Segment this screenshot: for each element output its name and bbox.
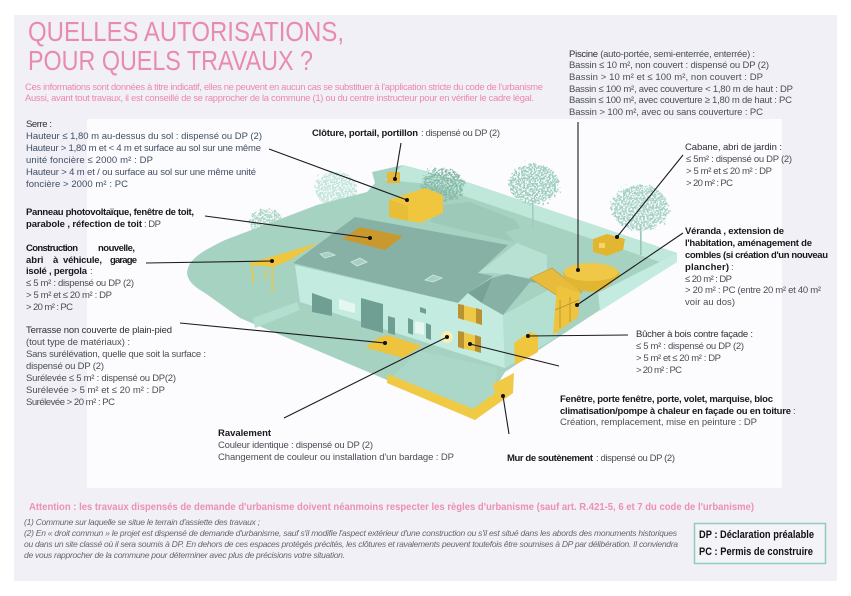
text: serre: Hauteur > 1,80 m et < 4 m et surface au sol sur une même [26,143,261,154]
text: piscine: Bassin > 10 m² et ≤ 100 m², non couvert : DP [569,72,763,83]
text: cloture: Clôture, portail, portillon [312,128,418,139]
leader: veranda [575,233,683,307]
footnotes: ou dans un site classé où il sera soumis à DP. En dehors de ces espaces protégés précités, les clôtures et ravalements peuvent toutefois être soumises à DP par délibération. Il conviendra [24,539,678,549]
legend box: PC : Permis de construire [699,546,813,558]
text: piscine [569,49,793,118]
text: terrasse: dispensé ou DP (2) [26,361,104,372]
yellow: woodshed [514,332,538,365]
tree left [249,209,283,266]
text: terrasse: (tout type de matériaux) : [26,337,130,348]
text: cabane: > 5 m² et ≤ 20 m² : DP [686,166,772,177]
sunken court [392,351,497,409]
text: piscine: Bassin ≤ 10 m², non couvert : dispensé ou DP (2) [569,60,769,71]
back garden strip [385,165,677,262]
text: ravalement: Ravalement [218,428,272,439]
text: bucher: > 20 m² : PC [636,365,682,376]
text: construction nouvelle: ≤ 5 m² : dispensé ou DP (2) [26,278,134,289]
text: piscine: Bassin ≤ 100 m², avec couverture ≥ 1,80 m de haut : PC [569,95,792,106]
footnotes: (2) En « droit commun » le projet est dispensé de demande d'urbanisme, sauf s'il modifie l'aspect extérieur d'une construction ou s'il est situé dans les abords des monuments historiques [24,528,678,538]
text: veranda: combles (si création d'un nouveau [685,250,828,261]
leader: fence [393,143,401,181]
text: construction nouvelle: > 5 m² et ≤ 20 m² : DP [26,290,112,301]
central white panel [87,119,782,488]
back roof [478,243,547,282]
skylights [320,252,442,282]
tree back right [509,164,559,228]
leader: pergola [146,259,274,263]
text: serre: unité foncière ≤ 2000 m² : DP [26,155,153,166]
text: fenetre [560,394,796,428]
footnotes: (1) Commune sur laquelle se situe le terrain d'assiette des travaux ; [24,517,261,527]
text: ravalement [218,428,454,463]
yellow: upper window [458,304,482,325]
text: construction nouvelle: à [53,255,59,266]
leader: window [468,342,559,366]
leader: greenhouse [269,149,409,202]
text: veranda [685,226,828,308]
text: terrasse: Surélevée > 20 m² : PC [26,397,115,408]
text: serre [26,119,262,190]
text: cabane: ≤ 5m² : dispensé ou DP (2) [686,154,792,165]
text: piscine: Piscine (auto-portée, semi-enterrée, enterrée) : [569,49,755,60]
intro text: Ces informations sont données à titre indicatif, elles ne peuvent en aucun cas se substituer à l'application stricte du code de l'urbanisme [25,81,543,92]
leader: garden shed [615,155,683,239]
text: veranda: Véranda , extension de [685,226,784,237]
attention notice: Attention : les travaux dispensés de demande d'urbanisme doivent néanmoins respecter les règles d'urbanisme (sauf art. R.421-5, 6 et 7 du code de l'urbanisme) [29,501,754,513]
text: ravalement: Changement de couleur ou installation d'un bardage : DP [218,452,454,463]
text: veranda: ≤ 20 m² : DP [685,274,732,285]
roof hip [468,278,492,303]
text: serre: Hauteur > 4 m et / ou surface au sol sur une même unité [26,167,256,178]
intro text: Aussi, avant tout travaux, il est conseillé de se rapprocher de la commune (1) ou du centre instructeur pour en vérifier le cadre légal. [25,92,534,103]
yellow: terrace [367,335,422,358]
front wall [295,265,505,368]
text: ravalement: Couleur identique : dispensé ou DP (2) [218,440,373,451]
text: terrasse: Sans surélévation, quelle que soit la surface : [26,349,206,360]
text: cloture [312,128,500,139]
text: terrasse: Surélevée > 5 m² et ≤ 20 m² : DP [26,385,165,396]
text: cabane: Cabane, abri de jardin : [685,142,782,153]
yellow: veranda [530,268,582,335]
title: POUR QUELS TRAVAUX ? [28,45,313,76]
footnotes [24,517,678,560]
text: bucher [636,329,753,376]
lawn shadow [430,202,520,242]
illustration: house and plot [187,164,677,420]
side wall [503,285,557,368]
yellow: pool [563,263,620,292]
text: construction nouvelle: véhicule, [63,255,102,266]
text: construction nouvelle: abri [26,255,43,266]
text: serre: Serre : [26,119,52,130]
text: construction nouvelle: Construction [26,243,78,254]
text: fenetre: climatisation/pompe à chaleur en façade ou en toiture [560,406,791,417]
yellow: solar panel [342,227,403,250]
text: veranda: l'habitation, aménagement de [685,238,812,249]
yellow: fence gate [387,172,400,183]
tree far right [612,185,668,255]
intro text [25,81,543,103]
text: panneau photovoltaique: parabole , réfection de toit [26,219,143,230]
leader: pool [576,122,580,272]
text: terrasse: Terrasse non couverte de plain-pied [26,325,172,336]
text: bucher: > 5 m² et ≤ 20 m² : DP [636,353,721,364]
text: construction nouvelle: garage [110,255,137,266]
text: piscine: Bassin ≤ 100 m², avec couverture < 1,80 m de haut : DP [569,84,793,95]
text: fenetre: Création, remplacement, mise en peinture : DP [560,417,757,428]
text: cloture: : dispensé ou DP (2) [421,128,500,139]
text: piscine: Bassin > 100 m², avec ou sans couverture : PC [569,107,763,118]
leader: terrace [180,323,387,345]
yellow: greenhouse [389,188,443,223]
text: construction nouvelle: : [90,266,93,277]
yellow: wall glow [441,331,453,343]
text: serre: Hauteur ≤ 1,80 m au-dessus du sol : dispensé ou DP (2) [26,131,262,142]
text: terrasse [26,325,206,408]
text: mur de soutenement: : dispensé ou DP (2) [596,453,675,464]
text: bucher: Bûcher à bois contre façade : [636,329,753,340]
gable roof [468,274,557,315]
legend box [694,524,826,564]
leader: retaining wall [501,394,509,434]
main roof [293,217,508,303]
text: construction nouvelle: nouvelle, [98,243,135,254]
text: veranda: voir au dos) [685,297,735,308]
text: cabane [685,142,792,189]
low left wall [253,302,300,328]
text: panneau photovoltaique [26,207,194,230]
title [28,16,344,76]
text: veranda: > 20 m² : PC (entre 20 m² et 40 m² [685,285,821,296]
front window panes [339,299,424,335]
text: construction nouvelle: > 20 m² : PC [26,302,73,313]
legend box: DP : Déclaration préalable [699,529,814,541]
text: cabane: > 20 m² : PC [686,178,733,189]
footnotes: de vous rapprocher de la commune pour déterminer avec plus de précisions votre situation. [24,550,345,560]
tree back left [315,172,357,225]
title: QUELLES AUTORISATIONS, [28,16,344,47]
text: veranda: : [731,262,734,273]
text: bucher: ≤ 5 m² : dispensé ou DP (2) [636,341,744,352]
leader: solar panel [205,216,372,240]
text: serre: foncière > 2000 m² : PC [26,179,128,190]
yellow: lower window [458,331,481,353]
text: panneau photovoltaique: : DP [144,219,161,230]
ground [187,165,677,420]
leader: facade [284,335,449,418]
text: mur de soutenement: Mur de soutènement [507,453,594,464]
text: veranda: plancher) [685,262,729,273]
yellow: pergola [250,243,318,292]
text: fenetre: : [793,406,796,417]
yellow: retaining wall [387,373,514,420]
text: mur de soutenement [507,453,675,464]
text: fenetre: Fenêtre, porte fenêtre, porte, volet, marquise, bloc [560,394,773,405]
front openings [312,293,431,340]
yellow: garden shed [593,234,625,256]
text: construction nouvelle: isolé , pergola [26,266,88,277]
text: panneau photovoltaique: Panneau photovoltaïque, fenêtre de toit, [26,207,194,218]
text: construction nouvelle [26,243,137,313]
leader: woodshed [526,334,628,338]
text: terrasse: Surélevée ≤ 5 m² : dispensé ou DP(2) [26,373,176,384]
tree back centre [422,168,464,202]
right boundary wall [598,253,677,311]
